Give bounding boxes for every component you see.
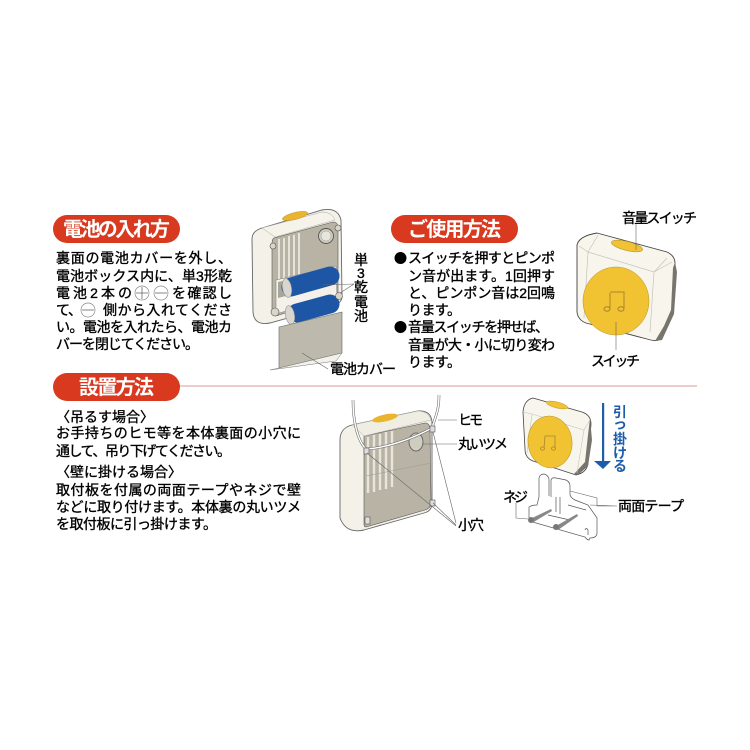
text block: usage instructions: ります。: [408, 302, 461, 318]
text block: hanging and wall mounting: [56, 409, 301, 532]
label: battery cover: 電池カバー: [330, 361, 396, 377]
text block: hanging and wall mounting: 〈吊るす場合〉: [56, 409, 154, 425]
heading: battery installation: [53, 215, 180, 243]
label: AA batteries (vertical): 池: [354, 308, 368, 324]
illustration: mounting plate with screws: [516, 474, 617, 540]
icon: volume switch: [610, 238, 644, 254]
illustration: battery compartment with cover: [252, 209, 354, 370]
icon: large yellow switch: [583, 267, 649, 335]
text block: battery instructions: 裏面の電池カバーを外し、: [56, 250, 232, 266]
label: hook on (vertical): [613, 404, 627, 474]
text block: usage instructions: [394, 250, 555, 370]
arrow: hook downward: [594, 403, 611, 469]
icon: music note: [544, 436, 555, 448]
label: hook on (vertical): っ: [613, 416, 627, 432]
illustration: chime front with switch: [577, 224, 677, 350]
heading: installation: [53, 373, 180, 401]
text block: battery instructions: [56, 250, 232, 352]
label: hook on (vertical): 引: [613, 404, 627, 420]
label: AA batteries (vertical): 電: [354, 294, 368, 310]
label: screw: ネジ: [503, 489, 528, 505]
text block: hanging and wall mounting: などに取り付けます。本体裏の丸いツメ: [56, 499, 301, 515]
text block: hanging and wall mounting: お手持ちのヒモ等を本体裏面の小穴に: [56, 425, 301, 441]
label: AA batteries (vertical): 乾: [354, 279, 368, 295]
text block: usage instructions: スイッチを押すとピンポ: [408, 250, 555, 266]
label: AA batteries (vertical): [354, 252, 368, 324]
icon: top switch: [372, 412, 398, 424]
text block: hanging and wall mounting: を取付板に引っ掛けます。: [56, 516, 217, 532]
label: small hole: 小穴: [458, 517, 484, 533]
text block: hanging and wall mounting: 通して、吊り下げてください。: [56, 443, 231, 459]
icon: round hook: [409, 433, 423, 451]
label: AA batteries (vertical): 3: [357, 265, 365, 281]
text block: usage instructions: ン音が出ます。1回押す: [408, 268, 555, 284]
heading: how to use: [391, 215, 518, 243]
label: switch: スイッチ: [591, 353, 640, 369]
icon: music note: [610, 292, 624, 308]
label: double-sided tape: 両面テープ: [618, 498, 684, 514]
label: round hook: 丸いツメ: [458, 436, 508, 452]
text block: battery instructions: を確認し: [172, 285, 232, 301]
text block: usage instructions: 音量が大・小に切り変わ: [408, 337, 555, 353]
text block: battery instructions: 側から入れてくださ: [103, 302, 232, 318]
text block: battery instructions: て、: [56, 302, 82, 318]
heading: battery installation: 電池の入れ方: [63, 218, 170, 241]
text block: hanging and wall mounting: 〈壁に掛ける場合〉: [56, 464, 182, 480]
text block: battery instructions: い。電池を入れたら、電池カ: [56, 319, 232, 335]
icon: screws: [528, 509, 578, 530]
label: hook on (vertical): け: [613, 445, 627, 461]
text block: battery instructions: 電池ボックス内に、単3形乾: [56, 268, 232, 284]
text block: usage instructions: 音量スイッチを押せば、: [408, 319, 549, 335]
heading: installation: 設置方法: [79, 376, 154, 399]
text block: usage instructions: ります。: [408, 354, 461, 370]
battery cover: [270, 312, 342, 370]
label: hook on (vertical): る: [613, 458, 627, 474]
label: volume switch: 音量スイッチ: [622, 210, 697, 226]
icon: yellow switch: [525, 413, 575, 471]
label: hook on (vertical): 掛: [613, 431, 627, 447]
label: string: ヒモ: [458, 412, 483, 428]
text block: usage instructions: と、ピンポン音は2回鳴: [408, 285, 555, 301]
string: [353, 395, 439, 449]
icon: top volume switch: [282, 209, 308, 223]
text block: battery instructions: バーを閉じてください。: [56, 336, 199, 352]
illustration: chime front small: [523, 398, 592, 475]
text block: battery instructions: 電池2本の: [56, 285, 132, 301]
illustration: chime back with string: [340, 395, 457, 531]
label: AA batteries (vertical): 単: [354, 252, 368, 268]
heading: how to use: ご使用方法: [408, 217, 501, 241]
text block: hanging and wall mounting: 取付板を付属の両面テープやネジで壁: [56, 482, 301, 498]
icon: small top switch: [546, 399, 568, 411]
icon: AA batteries: [281, 276, 330, 325]
